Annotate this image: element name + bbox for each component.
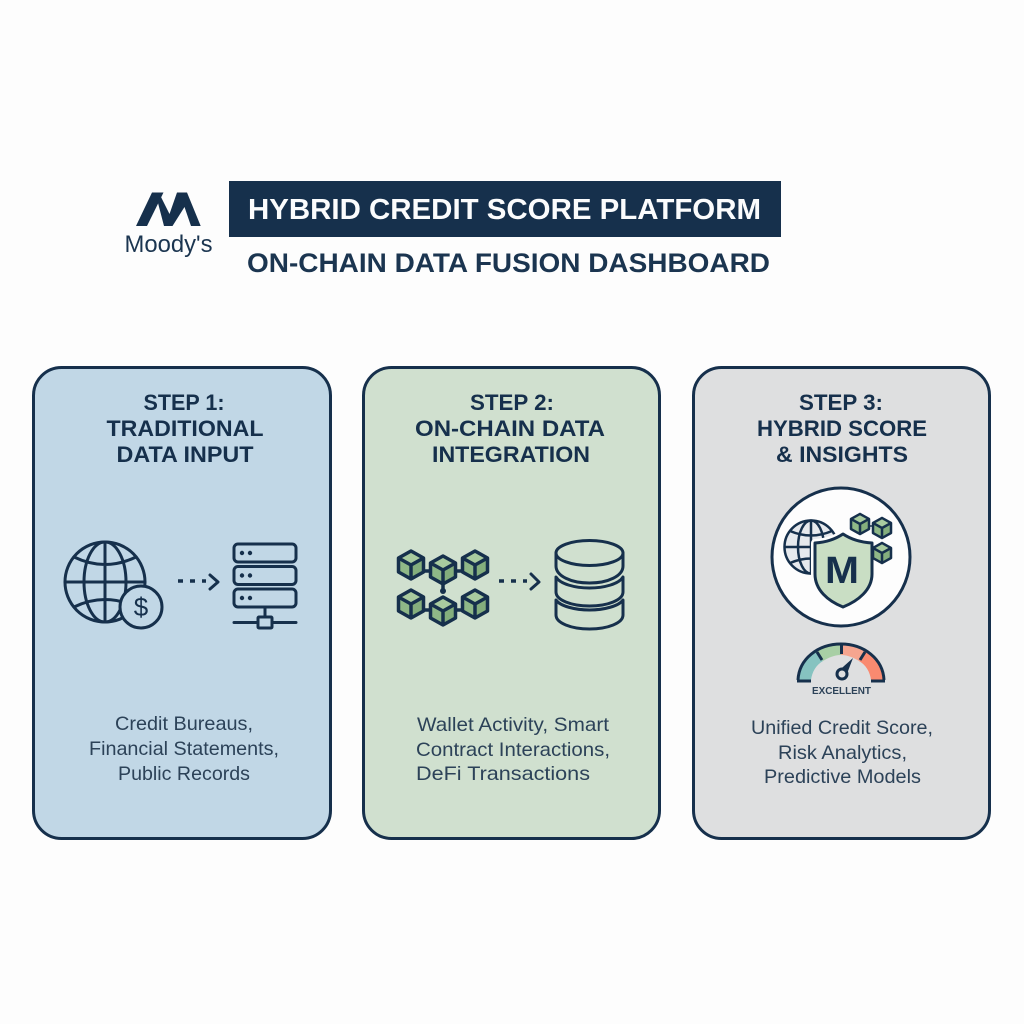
body text: step 3 (751, 717, 933, 788)
heading: step 1: STEP 1: (144, 390, 224, 415)
logo: Moody's: Moody's (124, 231, 212, 258)
body text: step 3: Predictive Models (764, 766, 921, 788)
panel: step 1 traditional data input (34, 368, 330, 838)
heading: step 2: ON-CHAIN DATA (415, 416, 605, 441)
heading: step 1: TRADITIONAL (106, 416, 264, 441)
body text: step 2: Wallet Activity, Smart (417, 714, 610, 736)
heading: step 2: STEP 2: (470, 390, 554, 415)
body text: step 1 (89, 713, 279, 785)
heading: step 3: HYBRID SCORE (757, 416, 927, 441)
arrow: dotted (499, 574, 539, 589)
cubes (851, 514, 891, 563)
heading: step 1 (106, 390, 264, 467)
heading: step 1: DATA INPUT (116, 442, 254, 467)
icon: server stack (234, 544, 296, 628)
gauge: excellent: EXCELLENT (812, 685, 872, 697)
icon: blockchain cubes (398, 551, 488, 625)
heading: step 3: & INSIGHTS (776, 442, 908, 467)
heading: step 2: INTEGRATION (432, 442, 590, 467)
body text: step 3: Unified Credit Score, (751, 717, 933, 739)
icon: database (556, 540, 623, 629)
panel: step 2 on-chain data integration (364, 368, 660, 838)
title banner: HYBRID CREDIT SCORE PLATFORM (248, 194, 761, 226)
icon: globe with dollar coin (65, 542, 162, 628)
body text: step 2: DeFi Transactions (416, 763, 590, 785)
logo: Moody's (124, 192, 212, 258)
heading: step 3 (757, 390, 927, 467)
body text: step 2: Contract Interactions, (416, 739, 610, 761)
body text: step 2 (416, 714, 610, 785)
arrow: dotted (178, 575, 218, 589)
heading: step 3: STEP 3: (799, 390, 883, 415)
subtitle: ON-CHAIN DATA FUSION DASHBOARD (247, 248, 770, 278)
body text: step 1: Public Records (118, 763, 250, 785)
gauge: excellent (797, 644, 885, 697)
body text: step 1: Financial Statements, (89, 738, 279, 760)
body text: step 1: Credit Bureaus, (115, 713, 253, 735)
icon: globe with dollar coin: $ (134, 592, 149, 622)
globe (784, 520, 838, 574)
title banner (229, 181, 781, 237)
body text: step 3: Risk Analytics, (778, 742, 907, 764)
icon: shield badge (772, 488, 910, 626)
shield: M (825, 550, 859, 592)
heading: step 2 (415, 390, 605, 467)
panel: step 3 hybrid score and insights (694, 368, 990, 838)
